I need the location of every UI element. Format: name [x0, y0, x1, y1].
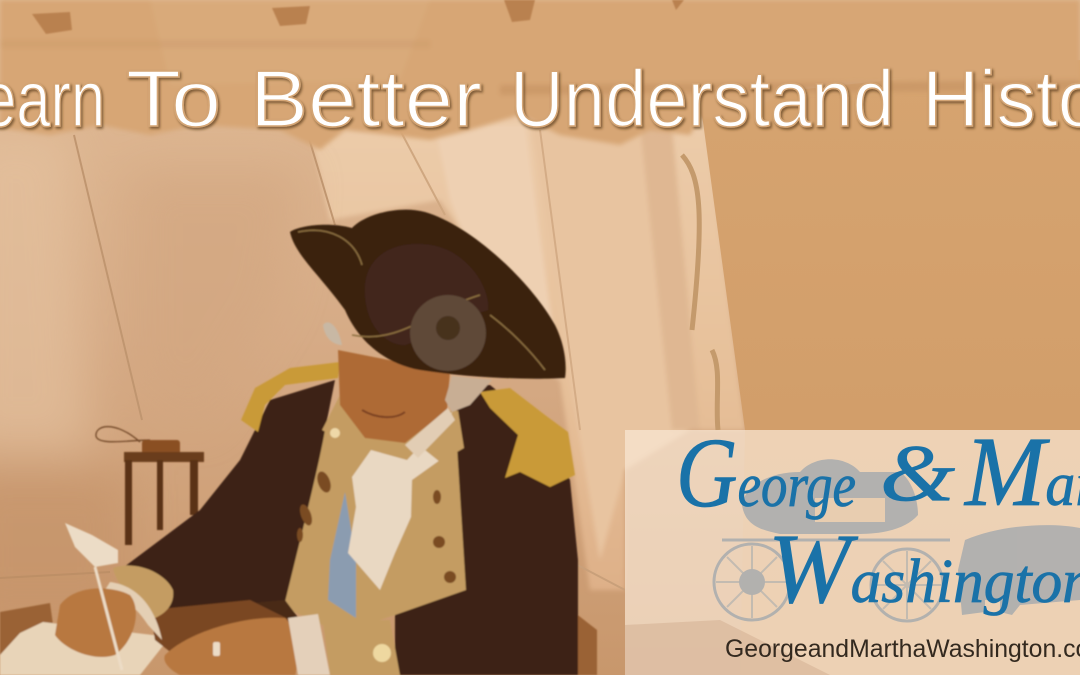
logo wordmark: &: [880, 430, 955, 518]
right tent wall: [700, 60, 1080, 675]
waistcoat buttons: [297, 470, 456, 583]
coat: left sleeve and body: [120, 380, 335, 618]
title: [0, 54, 1080, 143]
valance: top canvas band with scallops: [0, 0, 1080, 150]
panel: logo box: [625, 416, 1080, 675]
tricorn hat: [290, 210, 566, 379]
face and hair: [338, 350, 450, 443]
tent ties on the right: [682, 155, 718, 430]
writing hand: [55, 588, 136, 657]
rosette: [410, 295, 486, 371]
canvas toggles on the valance: [32, 0, 684, 34]
title: Understand: [510, 54, 894, 143]
tent poles and ropes: [0, 125, 625, 590]
paper on the desk: [0, 622, 170, 675]
title: To: [126, 54, 221, 143]
logo wordmark: [676, 416, 1080, 624]
blue sash: [328, 492, 356, 618]
bright centre curtains: [305, 110, 745, 590]
carpet on table corners: [0, 603, 597, 675]
logo wordmark: George: [676, 417, 856, 528]
tan waistcoat: [249, 410, 470, 640]
icon: carriage and horse silhouette: [714, 459, 1080, 621]
right hand with ring: [164, 618, 298, 675]
icon: quill: [65, 523, 122, 670]
collar: [322, 395, 370, 452]
cravat: [348, 412, 452, 590]
illustration: George Washington writing at his desk: [0, 210, 597, 675]
left wall shading folds: [0, 130, 300, 620]
icon: lantern: [96, 427, 204, 545]
title: Better: [250, 54, 482, 143]
desk: [150, 600, 290, 675]
right cuff: [288, 614, 330, 675]
left cuff and sleeve lace: [113, 565, 173, 620]
epaulettes: [241, 362, 340, 432]
